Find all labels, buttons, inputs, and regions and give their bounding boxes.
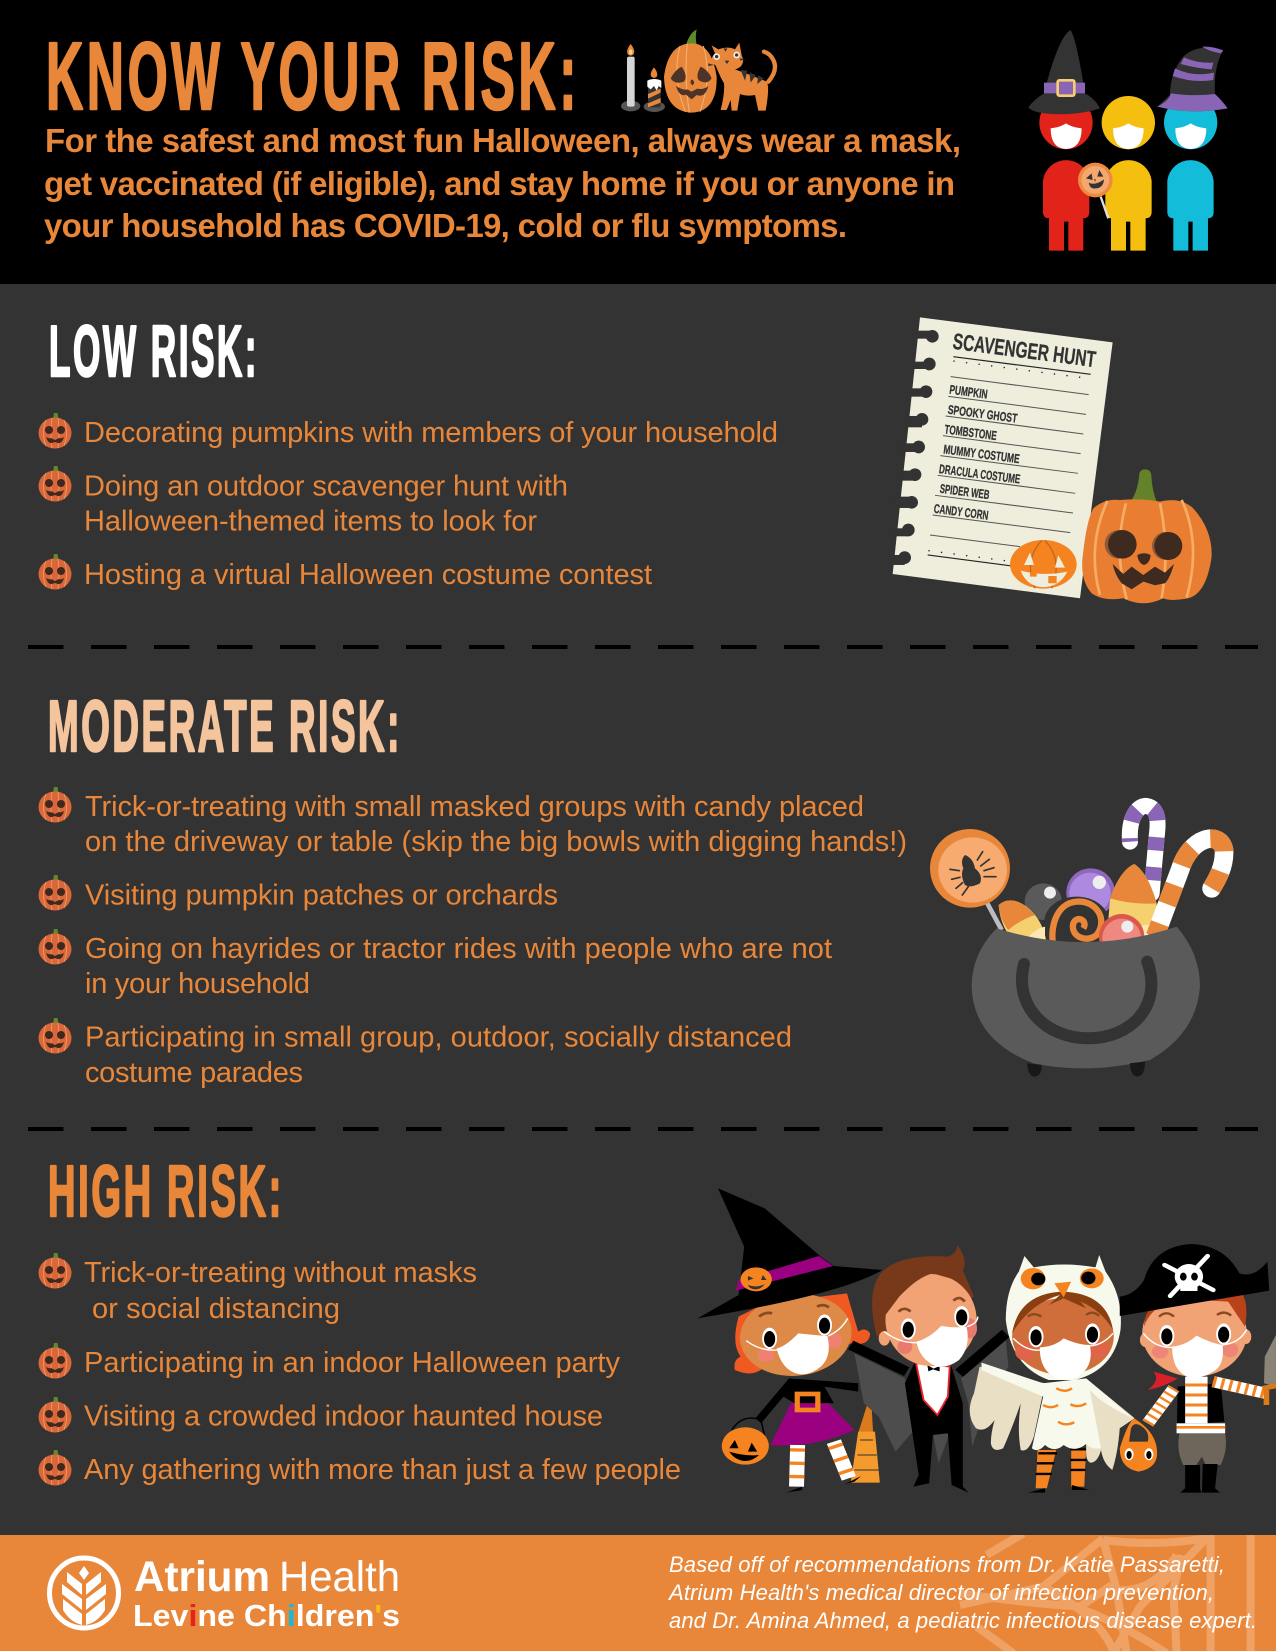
icon: candles, pumpkin and cat <box>621 29 775 113</box>
pirate child <box>1120 1244 1276 1493</box>
bullet list: moderate risk: in your household <box>85 968 310 1000</box>
owl child <box>970 1255 1157 1493</box>
intro text <box>44 122 961 244</box>
logo: Atrium Health Levine Children's: Health <box>279 1553 400 1601</box>
witch pumpkin bucket <box>732 1418 765 1437</box>
bullet list: moderate risk: Going on hayrides or tractor rides with people who are not <box>85 933 832 965</box>
logo: Atrium Health Levine Children's: Atrium <box>134 1553 270 1601</box>
bullet list: low risk: Decorating pumpkins with members of your household <box>84 417 778 449</box>
logo: Atrium Health Levine Children's <box>50 1553 400 1633</box>
illustration: scavenger hunt list and pumpkin: MUMMY COSTUME <box>943 442 1020 466</box>
bullet list: low risk <box>38 413 778 591</box>
illustration: scavenger hunt list and pumpkin: SPOOKY GHOST <box>947 403 1018 426</box>
illustration: scavenger hunt list and pumpkin: SCAVENGER HUNT <box>951 328 1098 372</box>
bullet list: high risk: Any gathering with more than just a few people <box>84 1454 681 1486</box>
source note: and Dr. Amina Ahmed, a pediatric infectious disease expert. <box>669 1608 1257 1633</box>
source note: Based off of recommendations from Dr. Katie Passaretti, <box>669 1552 1225 1577</box>
heading: moderate risk: MODERATE RISK: <box>48 687 402 767</box>
bullet list: high risk: Visiting a crowded indoor haunted house <box>84 1400 603 1432</box>
divider <box>28 645 1258 649</box>
panel: header <box>0 0 1276 284</box>
bullet list: high risk <box>38 1253 681 1486</box>
bullet list: moderate risk: costume parades <box>85 1057 303 1089</box>
panel: high risk <box>38 1152 1276 1493</box>
icon: three masked children <box>1028 30 1228 251</box>
heading: high risk: HIGH RISK: <box>48 1152 284 1232</box>
small pumpkin on the list <box>1010 540 1077 589</box>
illustration: scavenger hunt list and pumpkin <box>889 317 1212 603</box>
large jack-o-lantern <box>1082 469 1212 603</box>
bullet list: low risk: Halloween-themed items to look for <box>84 506 537 538</box>
illustration: scavenger hunt list and pumpkin: SPIDER WEB <box>939 482 990 502</box>
intro text: your household has COVID-19, cold or flu symptoms. <box>44 207 847 244</box>
bullet list: high risk: Participating in an indoor Halloween party <box>84 1347 620 1379</box>
illustration: scavenger hunt list and pumpkin: TOMBSTONE <box>944 422 998 443</box>
bullet list: moderate risk: Participating in small group, outdoor, socially distanced <box>85 1022 792 1054</box>
logo: Atrium Health Levine Children's: Levine Children's <box>133 1598 400 1633</box>
illustration: four costumed children in masks <box>697 1188 1276 1493</box>
panel: moderate risk <box>38 687 1224 1089</box>
vampire child <box>851 1245 1008 1493</box>
bullet list: moderate risk <box>38 787 907 1089</box>
illustration: scavenger hunt list and pumpkin: DRACULA COSTUME <box>938 462 1021 486</box>
illustration: scavenger hunt list and pumpkin: CANDY CORN <box>933 502 989 523</box>
bullet list: moderate risk: Visiting pumpkin patches or orchards <box>85 880 558 912</box>
title: KNOW YOUR RISK: <box>46 23 580 130</box>
divider <box>28 1127 1258 1131</box>
intro text: get vaccinated (if eligible), and stay home if you or anyone in <box>44 165 955 202</box>
panel: low risk <box>38 312 1212 603</box>
intro text: For the safest and most fun Halloween, always wear a mask, <box>45 122 961 159</box>
owl bucket <box>1120 1419 1157 1472</box>
bullet list: high risk: or social distancing <box>92 1293 340 1325</box>
source note <box>667 1552 1257 1633</box>
bullet list: low risk: Doing an outdoor scavenger hunt with <box>84 470 568 502</box>
bullet list: moderate risk: on the driveway or table (skip the big bowls with digging hands!) <box>85 826 907 858</box>
icon: leaf emblem <box>50 1558 118 1628</box>
bullet list: low risk: Hosting a virtual Halloween costume contest <box>84 559 652 591</box>
bullet list: moderate risk: Trick-or-treating with small masked groups with candy placed <box>85 791 864 823</box>
skull and crossbones <box>1165 1256 1213 1296</box>
source note: Atrium Health's medical director of infection prevention, <box>667 1580 1214 1605</box>
illustration: cauldron of candy <box>930 806 1224 1077</box>
panel: footer <box>0 1533 1276 1651</box>
spider web decoration <box>960 1533 1251 1651</box>
illustration: scavenger hunt list and pumpkin: PUMPKIN <box>949 383 988 402</box>
bullet list: high risk: Trick-or-treating without masks <box>84 1257 477 1289</box>
panel: low risk: LOW RISK: <box>49 312 259 392</box>
witch child <box>697 1188 882 1493</box>
